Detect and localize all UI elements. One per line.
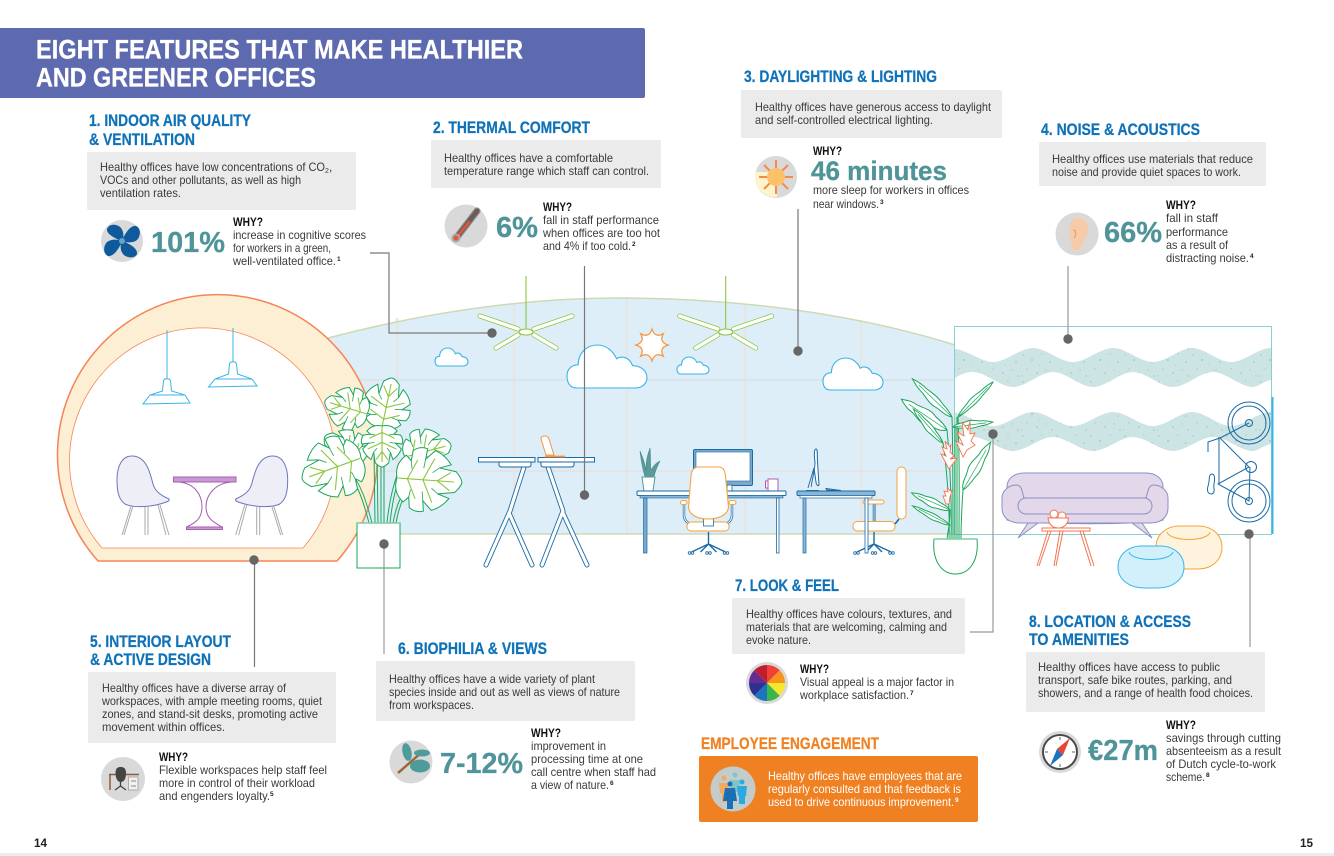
laptop [541,436,554,455]
description box 8 [1026,652,1265,712]
description box 7: evoke nature. [746,633,811,647]
why text 6: WHY? [531,728,561,740]
side-on orange chair [853,467,906,554]
description box 1 [87,152,356,210]
connector: window to daylight panel [793,209,803,356]
pendant lamps [143,328,257,404]
lounge area [954,326,1272,588]
panel: 2 thermal comfort [431,119,661,253]
description box 1: , [329,160,332,174]
description box 8: transport, safe bike routes, parking, and [1038,673,1232,687]
desk with monitor [637,448,786,554]
sofa [1002,473,1168,538]
description box 7 [732,598,965,654]
description box 6 [376,661,635,721]
why text 8: absenteeism as a result [1166,744,1282,758]
description box 5: zones, and stand-sit desks, promoting active [102,707,318,721]
pod chairs [117,456,288,535]
title text [36,34,523,92]
sun outline [636,329,668,361]
stat 6%: 6% [496,212,538,244]
description box 5: Healthy offices have a diverse array of [102,681,287,695]
glazed window wall [328,298,955,534]
description box 7: materials that are welcoming, calming and [746,620,947,634]
description box 5: movement within offices. [102,720,225,734]
panel: 3 daylighting [741,68,1002,211]
why text 1: WHY? [233,217,263,229]
page number 15: 15 [1300,838,1314,850]
potted desk plant [640,448,660,491]
why text 4: 4 [1250,253,1254,260]
engagement text [768,769,962,809]
description box 8: showers, and a range of health food choices. [1038,686,1253,700]
stat 66%: 66% [1104,217,1162,249]
description box 1: VOCs and other pollutants, as well as high [100,173,301,187]
why text 2: WHY? [543,202,572,214]
why text 8: scheme. [1166,770,1205,784]
icon: desk and chair [101,757,145,801]
orange office chair [680,467,736,554]
description box 4: Healthy offices use materials that reduce [1052,152,1253,166]
panel: employee engagement [699,735,978,822]
why text 3: more sleep for workers in offices [813,183,969,197]
description box 6: Healthy offices have a wide variety of plant [389,672,596,686]
why text 7 [799,664,954,702]
why text 5: and engenders loyalty. [159,789,270,803]
panel: 4 noise [1039,121,1266,265]
heading 5: 5. INTERIOR LAYOUT [90,633,231,651]
why text 4: WHY? [1166,200,1196,212]
engagement text: regularly consulted and that feedback is [768,782,961,796]
ceiling fans [480,276,772,348]
why text 6: 6 [610,780,614,787]
icon: leaves [390,740,432,784]
why text 1 [232,217,366,268]
description box 6: species inside and out as well as views of nature [389,685,620,699]
why text 6: call centre when staff had [531,765,656,779]
monstera plant [292,373,464,568]
desk with side monitor [797,449,906,554]
wall-mounted bicycle [1207,397,1272,534]
engagement text: Healthy offices have employees that are [768,769,962,783]
description box 5 [88,672,336,743]
connector: desk to thermal panel [580,266,589,500]
connector: plant to biophilia panel [379,539,389,654]
why text 7: WHY? [800,664,829,676]
why text 3: near windows. [813,197,879,211]
description box 1: 2 [325,168,329,175]
why label 3: WHY? [813,146,842,158]
heading 8: TO AMENITIES [1029,631,1129,649]
office illustration [58,276,1273,588]
panel: 8 location and amenities [1026,613,1282,784]
why text 3 [813,183,969,211]
description box 2 [431,140,661,188]
icon: colour wheel [746,662,788,704]
heading 8: 8. LOCATION & ACCESS [1029,613,1191,631]
why text 7: Visual appeal is a major factor in [800,675,954,689]
heading 8 [1029,613,1191,649]
heading 7: 7. LOOK & FEEL [735,577,839,595]
why text 8: 8 [1206,772,1210,779]
heading 4: 4. NOISE & ACOUSTICS [1041,121,1200,139]
connector: bike to location panel [1244,529,1254,647]
why text 2: fall in staff performance [543,213,659,227]
connector: pod to interior panel [249,555,259,667]
heading 3: 3. DAYLIGHTING & LIGHTING [744,68,937,86]
description box 1: ventilation rates. [100,186,181,200]
why text 5 [159,752,327,803]
heading 1: & VENTILATION [89,131,195,149]
pod table [174,477,236,530]
bean bags [1118,526,1222,588]
why text 8 [1166,720,1282,784]
why text 1: for workers in a green, [233,241,331,255]
why text 6: a view of nature. [531,778,609,792]
why text 8: of Dutch cycle-to-work [1166,757,1277,771]
description box 4: noise and provide quiet spaces to work. [1052,165,1241,179]
description box 4 [1039,142,1266,186]
why text 7: 7 [910,690,914,697]
icon: thermometer [444,204,488,248]
why text 6 [531,728,656,792]
page background strip [0,853,1334,856]
why text 3: 3 [880,199,884,206]
why text 7: workplace satisfaction. [799,688,909,702]
why text 6: improvement in [531,739,606,753]
stat 101%: 101% [151,227,225,259]
heading 1: 1. INDOOR AIR QUALITY [89,112,251,130]
heading 5: & ACTIVE DESIGN [90,651,211,669]
why text 2: when offices are too hot [542,226,661,240]
why text 4: performance [1166,225,1228,239]
why text 1: well-ventilated office. [232,254,336,268]
description box 3: Healthy offices have generous access to daylight [755,100,992,114]
why text 2 [542,202,661,253]
title banner [0,28,645,98]
description box 5: workspaces, with ample meeting rooms, quiet [101,694,323,708]
acoustic wave panels [955,348,1271,451]
engagement text: used to drive continuous improvement. [768,795,954,809]
heading 1 [89,112,251,149]
why text 4: fall in staff [1166,211,1219,225]
stat 7-12%: 7-12% [440,748,523,780]
icon: ear [1056,212,1098,256]
coffee table with fruit bowl [1037,510,1094,566]
clouds [435,345,883,390]
engagement heading: EMPLOYEE ENGAGEMENT [701,735,879,753]
engagement box [699,756,978,822]
title text: AND GREENER OFFICES [36,62,316,92]
why text 2: and 4% if too cold. [543,239,631,253]
standing desks [478,436,594,565]
why text 5: WHY? [159,752,188,764]
panel: 6 biophilia [376,640,656,792]
meeting pod [58,295,378,561]
icon: fan [101,220,143,262]
why text 8: WHY? [1166,720,1196,732]
stat €27m: €27m [1088,735,1158,767]
description box 8: Healthy offices have access to public [1038,660,1220,674]
why text 6: processing time at one [531,752,643,766]
description box 3: and self-controlled electrical lighting. [755,113,933,127]
heading 2: 2. THERMAL COMFORT [433,119,590,137]
tropical plant with flowers [897,376,996,574]
why text 5: 5 [270,791,274,798]
icon: compass [1039,731,1081,773]
description box 3 [741,90,1002,138]
why text 4: as a result of [1166,238,1229,252]
description box 1: Healthy offices have low concentrations of CO [100,160,325,174]
engagement text: 9 [955,797,959,804]
why text 5: Flexible workspaces help staff feel [159,763,327,777]
connector: sofa wall to look and feel panel [970,429,998,632]
why text 5: more in control of their workload [159,776,315,790]
why text 4 [1166,200,1254,265]
why text 1: 1 [337,256,341,263]
icon: people [710,766,756,812]
heading 6: 6. BIOPHILIA & VIEWS [398,640,547,658]
why text 8: savings through cutting [1166,731,1281,745]
connector: wave panel to noise panel [1063,266,1073,344]
panel: 1 indoor air quality [87,112,366,268]
why text 1: increase in cognitive scores [233,228,366,242]
stat 46 minutes: 46 minutes [811,156,947,186]
description box 2: temperature range which staff can control. [444,164,649,178]
connector: fan to air quality panel [370,253,497,338]
why text 2: 2 [632,241,636,248]
description box 6: from workspaces. [389,698,474,712]
mug [766,479,778,491]
title text: EIGHT FEATURES THAT MAKE HEALTHIER [36,34,523,64]
heading 5 [90,633,231,669]
page number 14: 14 [34,838,48,850]
panel: 7 look and feel [732,577,965,704]
icon: sun [755,156,797,198]
panel: 5 interior layout [88,633,336,803]
why text 4: distracting noise. [1166,251,1249,265]
description box 2: Healthy offices have a comfortable [444,151,613,165]
description box 7: Healthy offices have colours, textures, and [746,607,952,621]
